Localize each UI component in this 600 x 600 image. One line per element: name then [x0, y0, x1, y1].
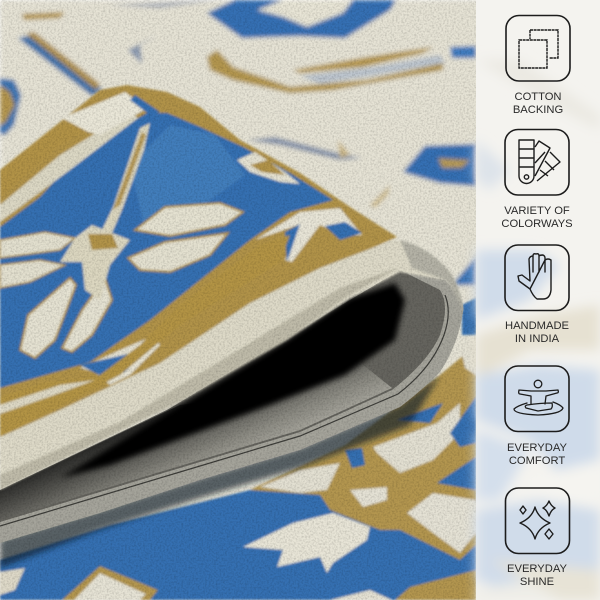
feature: everyday shine: SHINE: [520, 576, 554, 588]
rolled rug face: [0, 85, 463, 490]
gold border stripes: [0, 235, 290, 437]
label: VARIETY OF: [504, 205, 570, 217]
feature: cotton backing: BACKING: [513, 104, 563, 116]
gold wedge: [0, 113, 100, 197]
shadow below the fold: [0, 375, 440, 568]
icon: cotton swatches: [506, 16, 570, 81]
feature: handmade in india: IN INDIA: [515, 333, 560, 345]
rug photograph: [0, 0, 480, 600]
label: EVERYDAY: [507, 563, 567, 575]
label: HANDMADE: [505, 320, 569, 332]
lower flat rug: blue field and cream flowers: [0, 298, 476, 600]
icon: sparkles: [506, 488, 570, 554]
icon: colour fan deck: [505, 130, 569, 195]
feature: everyday shine: [506, 488, 570, 588]
icon: hand: [505, 245, 569, 310]
feature: everyday comfort: [505, 366, 569, 467]
label: COTTON: [514, 91, 562, 103]
translucent side panel: [476, 0, 600, 600]
feature: variety of colorways: COLORWAYS: [501, 218, 573, 230]
feature: variety of colorways: [501, 130, 573, 230]
corner motifs: [237, 152, 300, 184]
fold underside: [0, 270, 463, 543]
pile texture: [0, 0, 476, 600]
feature: cotton backing: [506, 16, 570, 116]
flat rug background: [0, 0, 480, 600]
petals: [135, 203, 243, 236]
label: EVERYDAY: [507, 442, 567, 454]
feature: handmade in india: [505, 245, 569, 345]
cream binding band: [0, 240, 463, 490]
blue field: [0, 113, 333, 388]
feature: everyday comfort: COMFORT: [509, 455, 565, 467]
icon: meditating figure: [505, 366, 569, 432]
